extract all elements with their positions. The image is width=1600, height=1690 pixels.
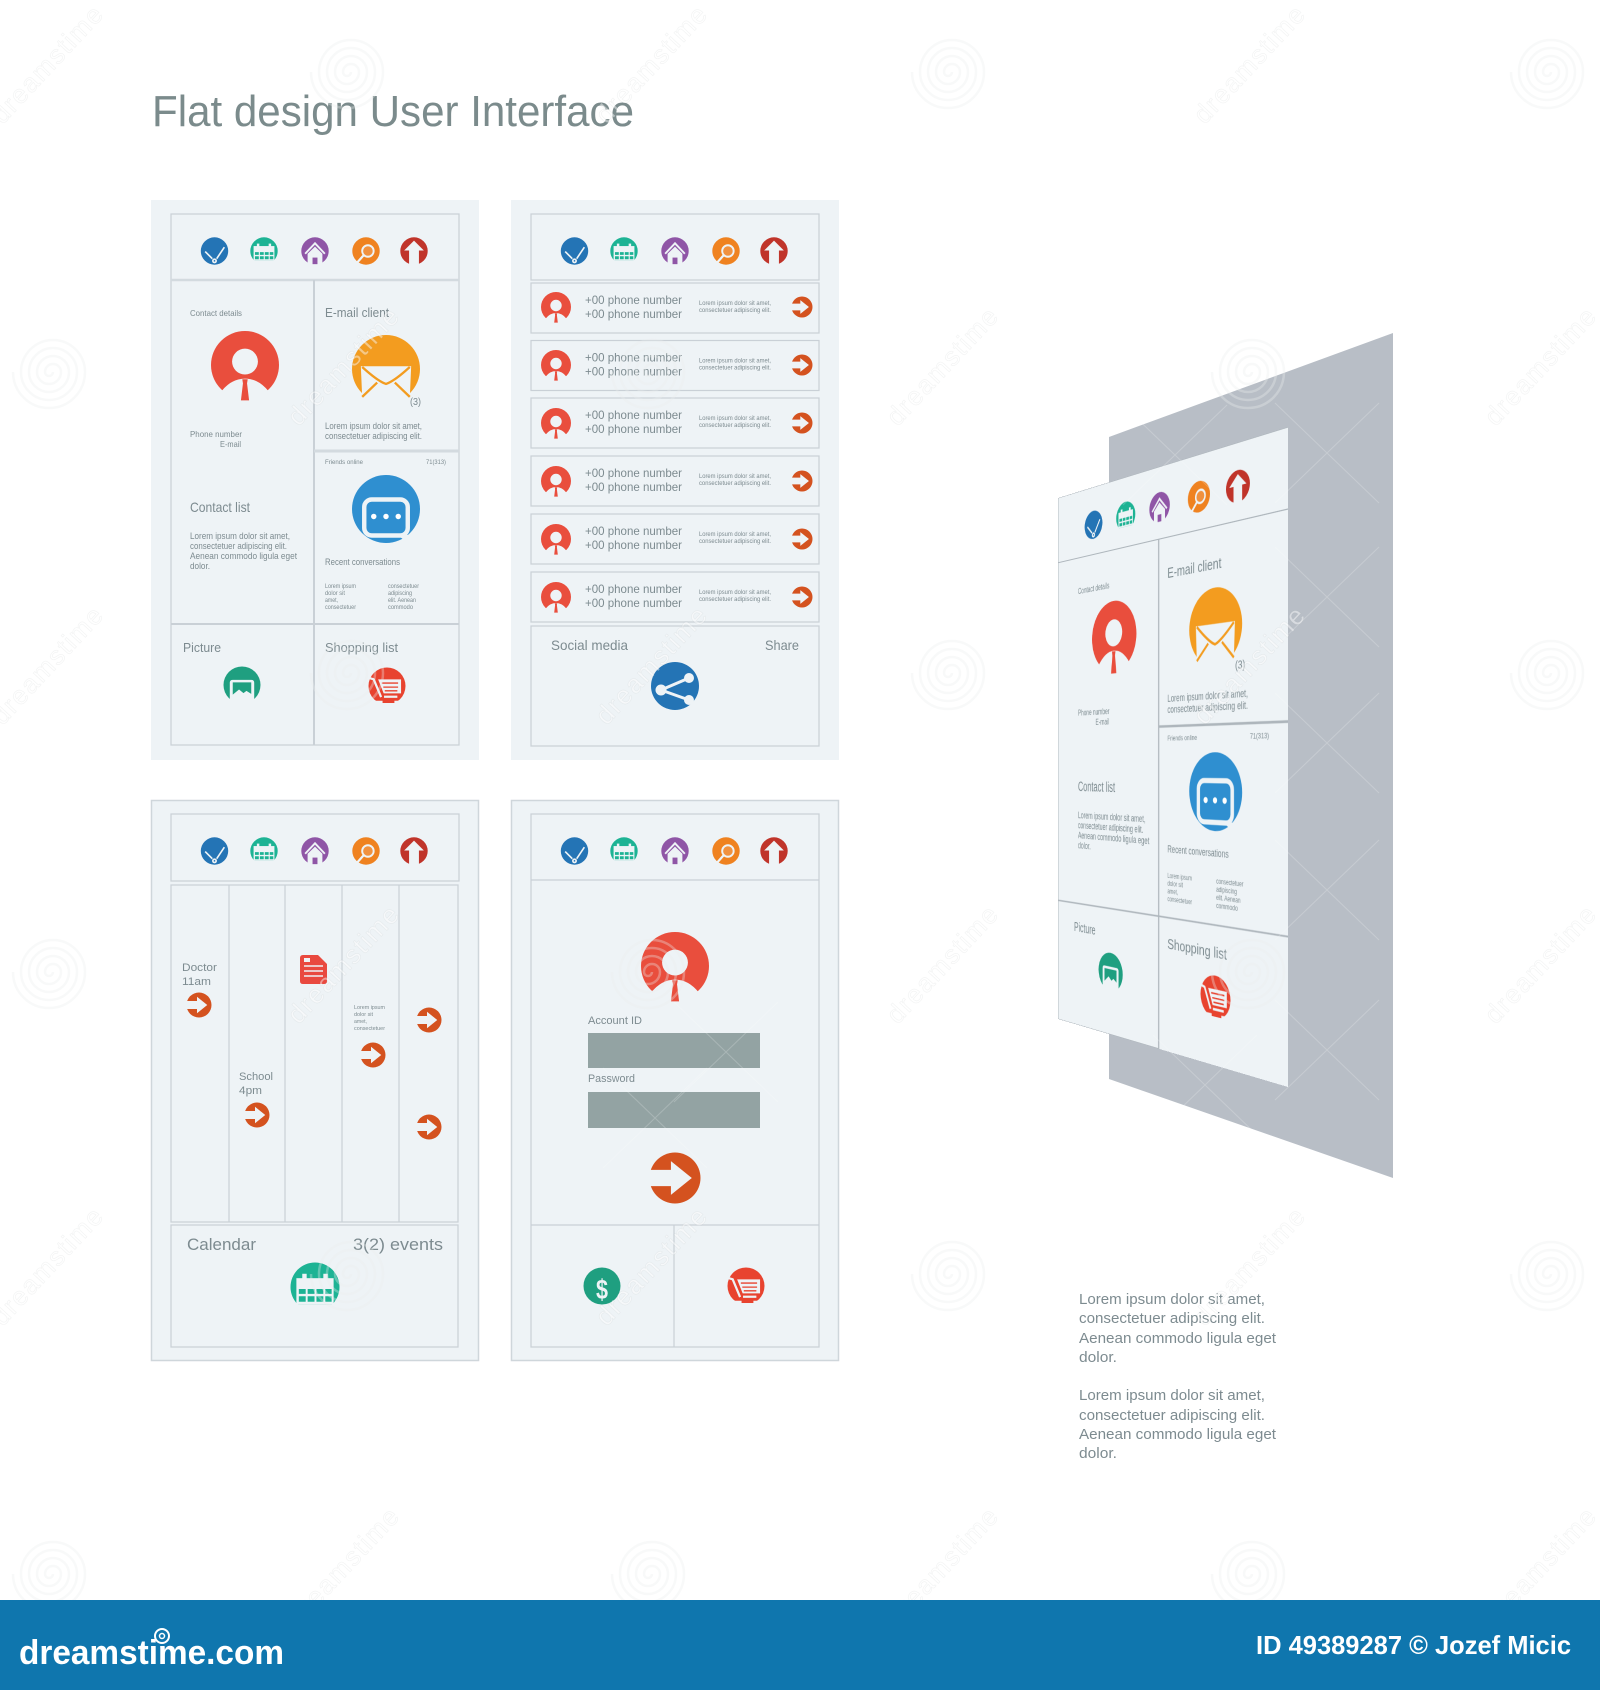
icon: dollar [584,1268,620,1305]
phone row 3: +00 phone number [585,422,682,436]
school event: 4pm [239,1085,262,1097]
phone row 2 [531,340,819,390]
tilted recent conversations: Recent conversations [1167,843,1246,862]
phone row 2: +00 phone number [585,364,682,378]
phone row 6: +00 phone number [585,596,682,610]
watermark wordmarks: dreamstime [880,898,1005,1029]
tilted contact details: Contact details [1078,580,1117,597]
password field [588,1073,760,1128]
description text: consectetuer adipiscing elit. [1079,1310,1265,1327]
icon: account avatar [641,932,709,1004]
small note event: Lorem ipsum [354,1005,385,1011]
phone row 1: +00 phone number [585,293,682,307]
watermark wordmarks: dreamstime [1187,1200,1312,1331]
email client block [325,305,422,441]
panel: login [512,800,838,1360]
tilted navigation icons [1085,467,1250,542]
watermark wordmarks: dreamstime [589,1200,714,1331]
phone row 1 [531,283,819,333]
small note event: amet, [354,1019,367,1025]
tilted picture block: Picture [1074,921,1101,940]
tilted email client: E-mail client [1167,555,1228,582]
tilted recent conversations: consectetuer [1167,897,1196,908]
panel: contact dashboard [151,200,479,760]
recent conversations block: commodo [388,605,414,611]
social media block: Social media [551,637,628,653]
picture block [183,640,260,704]
email client block: E-mail client [325,305,389,320]
icon: submit arrow [647,1152,700,1204]
recent conversations block: Lorem ipsum [325,584,356,590]
contact list text: Contact list [190,499,250,515]
description text: Aenean commodo ligula eget [1079,1330,1277,1347]
email client block: consectetuer adipiscing elit. [325,431,422,441]
tilted contact list: dolor. [1078,839,1094,852]
description text: Lorem ipsum dolor sit amet, [1079,1387,1265,1404]
phone row 3: +00 phone number [585,408,682,422]
panel: phone list [511,200,839,760]
tilted recent conversations: adipiscing [1216,887,1240,898]
watermark wordmarks: dreamstime [281,300,406,431]
tilted email client [1167,551,1248,716]
watermark wordmarks: dreamstime [281,1500,406,1631]
watermark wordmarks: dreamstime [1478,898,1600,1029]
footer bar [0,1600,1600,1690]
phone row 4 [531,456,819,506]
tilted email client: (3) [1235,658,1246,672]
tilted perspective panel [1058,427,1288,1087]
recent conversations block: consectetuer [388,584,419,590]
contact details block: Contact details [190,308,242,318]
tilted contact details: Phone number [1078,707,1116,718]
icon: cart [728,1268,764,1305]
school event: School [239,1071,273,1083]
recent conversations block: adipiscing [388,591,412,597]
tilted recent conversations: 71(313) [1250,734,1270,742]
phone row 5: +00 phone number [585,538,682,552]
watermark wordmarks: dreamstime [1478,1500,1600,1631]
account id field: Account ID [588,1015,642,1027]
contact list text: Lorem ipsum dolor sit amet, [190,531,290,542]
tilted recent conversations: commodo [1216,904,1240,914]
phone row 4: consectetuer adipiscing elit. [699,481,771,487]
tilted recent conversations: elit. Aenean [1216,895,1245,906]
calendar footer: 3(2) events [353,1235,443,1254]
tilted picture block [1074,921,1123,995]
phone row 4: Lorem ipsum dolor sit amet, [699,474,771,480]
navigation icons [561,837,788,865]
watermark wordmarks: dreamstime [880,300,1005,431]
recent conversations block: Recent conversations [325,557,400,568]
social media block: Share [765,637,799,653]
contact details block: Phone number [190,429,242,439]
tilted recent conversations: dolor sit [1167,881,1184,890]
shopping list block [325,640,406,705]
tilted recent conversations: amet, [1167,889,1180,898]
doctor event [182,962,217,1018]
title: Flat design User Interface [152,87,634,136]
tilted contact list: Lorem ipsum dolor sit amet, [1078,809,1163,826]
watermark wordmarks: dreamstime [1478,300,1600,431]
tilted email client: consectetuer adipiscing elit. [1167,697,1265,716]
phone row 6: Lorem ipsum dolor sit amet, [699,590,771,596]
watermark wordmarks: dreamstime [1187,0,1312,129]
watermark wordmarks: dreamstime [589,599,714,730]
contact details block [190,308,279,449]
phone row 5: consectetuer adipiscing elit. [699,539,771,545]
doctor event: Doctor [182,962,217,974]
phone row 6: +00 phone number [585,582,682,596]
phone row 2: +00 phone number [585,350,682,364]
email client block: (3) [410,397,421,408]
arrow: event 2 [416,1114,442,1140]
calendar footer [187,1235,443,1312]
contact details block: E-mail [220,439,241,449]
tilted email client: Lorem ipsum dolor sit amet, [1167,685,1265,705]
calendar footer: Calendar [187,1235,256,1254]
small note event [354,1005,386,1068]
phone row 3 [531,398,819,448]
footer logo: dreamstime.com [19,1634,284,1672]
doctor event: 11am [182,976,211,988]
phone row 6: consectetuer adipiscing elit. [699,597,771,603]
email client block: Lorem ipsum dolor sit amet, [325,421,422,431]
social media block [531,626,819,746]
small note event: dolor sit [354,1012,373,1018]
recent conversations block: dolor sit [325,591,345,597]
description text [1079,1291,1277,1462]
phone row 1: +00 phone number [585,307,682,321]
phone row 3: consectetuer adipiscing elit. [699,423,771,429]
watermark wordmarks: dreamstime [589,0,714,129]
recent conversations block: 71(313) [426,460,446,466]
description text: dolor. [1079,1445,1117,1462]
tilted recent conversations [1167,732,1270,918]
phone row 5: Lorem ipsum dolor sit amet, [699,532,771,538]
tilted recent conversations: Lorem ipsum [1167,874,1196,884]
description text: consectetuer adipiscing elit. [1079,1407,1265,1424]
school event [239,1071,273,1128]
navigation icons [561,237,788,265]
phone row 5: +00 phone number [585,524,682,538]
recent conversations block: consectetuer [325,605,356,611]
tilted recent conversations: Friends online [1167,736,1198,743]
phone row 4: +00 phone number [585,466,682,480]
description text: Aenean commodo ligula eget [1079,1426,1277,1443]
contact list text: dolor. [190,561,210,572]
picture block: Picture [183,640,221,655]
description text: Lorem ipsum dolor sit amet, [1079,1291,1265,1308]
account id field [588,1015,760,1068]
tilted contact list: Aenean commodo ligula eget [1078,829,1167,848]
tilted contact details: E-mail [1095,718,1112,728]
watermark wordmarks: dreamstime [1187,599,1312,730]
recent conversations block: elit. Aenean [388,598,416,604]
recent conversations block: amet, [325,598,338,604]
tilted shopping list block: Shopping list [1167,938,1231,965]
phone row 3: Lorem ipsum dolor sit amet, [699,416,771,422]
tilted contact list: consectetuer adipiscing elit. [1078,819,1162,837]
watermark wordmarks: dreamstime [281,898,406,1029]
tilted contact list: Contact list [1078,780,1126,796]
recent conversations block: Friends online [325,460,364,466]
tilted contact list [1078,780,1150,858]
navigation icons [201,837,428,865]
watermark wordmarks: dreamstime [880,1500,1005,1631]
phone row 1: Lorem ipsum dolor sit amet, [699,301,771,307]
phone row 5 [531,514,819,564]
password field: Password [588,1073,635,1085]
description text: dolor. [1079,1349,1117,1366]
small note event: consectetuer [354,1026,385,1032]
perspective backdrop [1109,333,1393,1178]
footer credit: ID 49389287 © Jozef Micic [1256,1630,1571,1660]
document icon [300,955,327,984]
phone row 2: Lorem ipsum dolor sit amet, [699,358,771,364]
recent conversations block [325,460,446,611]
shopping list block: Shopping list [325,640,398,655]
phone row 1: consectetuer adipiscing elit. [699,308,771,314]
icon: dollar: $ [596,1274,608,1305]
watermark crosses [603,403,1379,1168]
navigation icons [201,237,428,265]
phone row 2: consectetuer adipiscing elit. [699,366,771,372]
tilted shopping list block [1167,938,1230,1023]
panel: calendar [152,800,478,1360]
arrow: event 1 [416,1008,442,1032]
contact list text: Aenean commodo ligula eget [190,551,297,562]
contact list text: consectetuer adipiscing elit. [190,541,287,552]
phone row 6 [531,572,819,622]
phone row 4: +00 phone number [585,480,682,494]
tilted recent conversations: consectetuer [1216,879,1247,890]
tilted contact details [1078,576,1136,728]
contact list text [190,499,297,572]
